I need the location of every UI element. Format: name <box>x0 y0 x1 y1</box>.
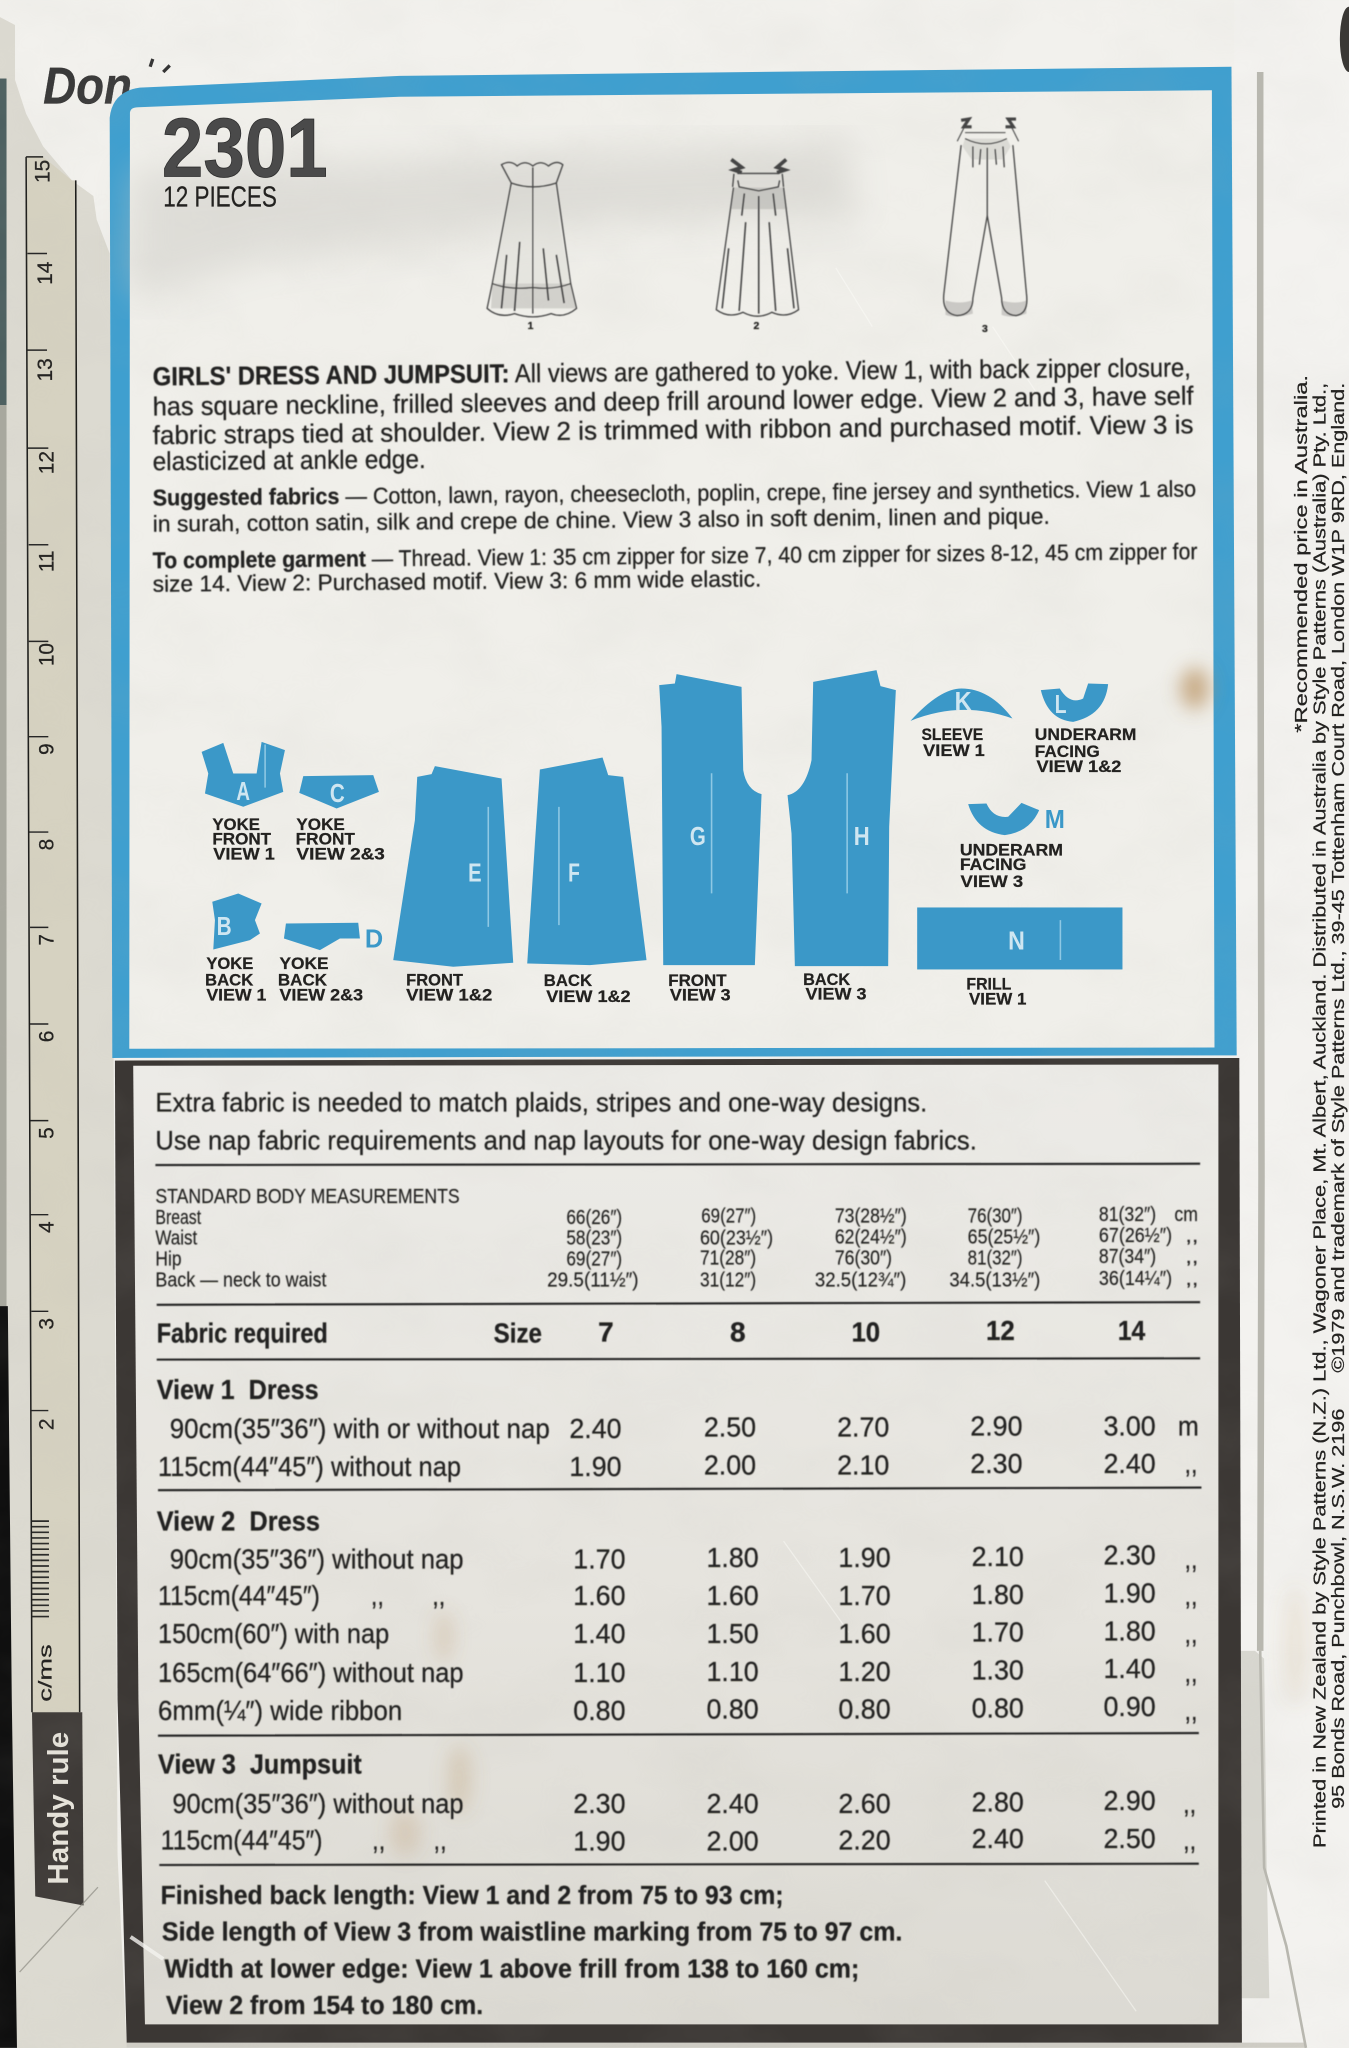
description: to complete garment: To complete garment — Thread. View 1: 35 cm zipper for size 7, 40 cm zipper for sizes 8-12, 45 cm zipper for <box>153 538 1198 573</box>
view 2 dress section: ,, <box>432 1580 445 1611</box>
view 2 dress section: 6mm(¼″) wide ribbon <box>158 1695 402 1726</box>
view 2 dress section: ,, <box>371 1580 384 1611</box>
view 1 dress section: 1.90 <box>569 1451 622 1482</box>
standard body measurements table <box>155 1186 1198 1291</box>
view 3 jumpsuit section: 2.40 <box>706 1788 759 1819</box>
piece captions: VIEW 2&3 <box>296 845 385 863</box>
view 1 dress section: 2.40 <box>1103 1448 1156 1479</box>
view 2 dress section: 1.20 <box>838 1656 891 1687</box>
right margin imprint text: *Recommended price in Australia. <box>1291 375 1311 733</box>
view 2 dress section: ,, <box>1184 1618 1198 1649</box>
view 3 jumpsuit section: 2.30 <box>573 1788 626 1819</box>
piece captions: YOKE <box>279 955 329 973</box>
description: to complete garment <box>153 538 1198 597</box>
standard body measurements table: 58(23″) <box>566 1228 622 1250</box>
view 2 dress section: 1.30 <box>972 1655 1024 1686</box>
piece captions: FACING <box>1035 743 1100 761</box>
view 2 dress section: 2.30 <box>1103 1540 1156 1571</box>
view 3 jumpsuit section: View 3 Jumpsuit <box>158 1749 362 1780</box>
piece captions: FACING <box>960 856 1026 874</box>
standard body measurements table: ,, <box>1185 1268 1198 1290</box>
piece letters: A <box>236 776 250 806</box>
view 2 dress section: 0.90 <box>1103 1691 1156 1722</box>
ruler numbers <box>32 160 59 1430</box>
illustration: view 3 jumpsuit: 3 <box>982 324 988 335</box>
piece letters: K <box>955 686 972 716</box>
view 1 dress section: 2.90 <box>970 1410 1023 1441</box>
description: girls' dress and jumpsuit: has square neckline, frilled sleeves and deep frill around lower edge. View 2 and 3, have self <box>153 381 1194 421</box>
standard body measurements table: 31(12″) <box>700 1269 756 1291</box>
standard body measurements table: Back — neck to waist <box>155 1269 327 1291</box>
ruler: c/ms <box>35 1644 56 1702</box>
finished measurements notes: Side length of View 3 from waistline marking from 75 to 97 cm. <box>162 1917 902 1947</box>
piece captions: VIEW 1&2 <box>406 986 492 1004</box>
view 3 jumpsuit section: 2.40 <box>972 1823 1024 1854</box>
standard body measurements table: 65(25½″) <box>968 1226 1040 1248</box>
table text <box>155 1087 1201 2020</box>
view 2 dress section: ,, <box>1184 1544 1198 1575</box>
view 3 jumpsuit section: ,, <box>1183 1788 1196 1819</box>
ruler <box>26 157 84 1905</box>
standard body measurements table: Waist <box>155 1228 198 1250</box>
piece captions: VIEW 1 <box>969 990 1026 1008</box>
standard body measurements table: Breast <box>155 1207 201 1229</box>
right group piece shapes <box>659 670 1122 969</box>
view 1 dress section: 2.40 <box>569 1413 622 1444</box>
view 1 dress section: View 1 Dress <box>157 1374 319 1405</box>
view 3 jumpsuit section: ,, <box>434 1824 447 1855</box>
piece captions: VIEW 1&2 <box>1036 758 1121 776</box>
description: girls' dress and jumpsuit: elasticized at ankle edge. <box>153 444 426 476</box>
view 2 dress section: 1.80 <box>1103 1615 1156 1646</box>
ruler numbers: 5 <box>36 1127 59 1139</box>
table panel frame <box>115 1058 1242 2043</box>
piece captions: VIEW 3 <box>670 987 731 1005</box>
view 2 dress section: 1.40 <box>1103 1653 1156 1684</box>
view 1 dress section: 90cm(35″36″) with or without nap <box>170 1413 550 1444</box>
left torn flap <box>0 17 127 2048</box>
creases and shading <box>20 141 1136 2011</box>
standard body measurements table: 29.5(11½″) <box>547 1269 639 1291</box>
standard body measurements table: 32.5(12¾″) <box>815 1269 906 1291</box>
view 1 dress section <box>157 1374 1199 1482</box>
view 2 dress section: 1.60 <box>573 1580 626 1611</box>
stains <box>389 667 1309 1856</box>
finished measurements notes <box>161 1880 902 2020</box>
view 2 dress section: 150cm(60″) with nap <box>158 1618 389 1649</box>
description: suggested fabrics: Suggested fabrics — Cotton, lawn, rayon, cheesecloth, poplin, crepe, fine jersey and synthetics. View 1 also <box>153 475 1196 511</box>
view 3 jumpsuit section: 2.80 <box>972 1786 1024 1817</box>
view 2 dress section: 1.70 <box>972 1617 1024 1648</box>
view 2 dress section: 0.80 <box>972 1692 1024 1723</box>
view 2 dress section <box>157 1506 1198 1726</box>
standard body measurements table: 73(28½″) <box>835 1205 907 1227</box>
piece captions: BACK <box>278 971 327 989</box>
standard body measurements table: 67(26½″) <box>1099 1225 1172 1247</box>
handy rule label: Handy rule <box>43 1732 75 1885</box>
view 2 dress section: 1.10 <box>706 1656 759 1687</box>
standard body measurements table: STANDARD BODY MEASUREMENTS <box>155 1186 460 1208</box>
view 2 dress section: 1.50 <box>706 1618 759 1649</box>
standard body measurements table: 66(26″) <box>566 1207 622 1229</box>
view 2 dress section: ,, <box>1184 1695 1198 1726</box>
finished measurements notes: Width at lower edge: View 1 above frill from 138 to 160 cm; <box>165 1953 859 1983</box>
piece captions: BACK <box>544 972 592 990</box>
piece count: 12 PIECES <box>163 182 277 214</box>
view 1 dress section: m <box>1178 1410 1199 1441</box>
standard body measurements table: cm <box>1174 1204 1198 1226</box>
ruler numbers: 6 <box>36 1031 59 1042</box>
description: girls' dress and jumpsuit: GIRLS' DRESS AND JUMPSUIT: All views are gathered to yoke. View 1, with back zipper closure, <box>153 352 1191 391</box>
size header row: 12 <box>986 1315 1015 1346</box>
piece captions: UNDERARM <box>960 842 1063 860</box>
view 3 jumpsuit section: 2.20 <box>838 1824 891 1855</box>
view 2 dress section: 90cm(35″36″) without nap <box>170 1544 464 1575</box>
view 1 dress section: 3.00 <box>1103 1410 1156 1441</box>
handy rule label <box>32 1712 84 1905</box>
view 2 dress section: 2.10 <box>972 1541 1024 1572</box>
illustration: view 2 dress <box>716 159 799 332</box>
standard body measurements table: 69(27″) <box>701 1205 756 1227</box>
view 2 dress section: 1.70 <box>573 1544 626 1575</box>
right fold line <box>1260 72 1306 2048</box>
piece letters: L <box>1055 689 1067 719</box>
piece letters: F <box>568 858 580 888</box>
piece captions: YOKE <box>296 816 345 834</box>
size header row: Fabric required <box>157 1318 328 1349</box>
finished measurements notes: Finished back length: View 1 and 2 from 75 to 93 cm; <box>161 1880 784 1910</box>
piece letters: B <box>217 911 232 941</box>
piece captions: UNDERARM <box>1035 726 1136 744</box>
view 3 jumpsuit section: 2.90 <box>1103 1785 1156 1816</box>
pattern pieces diagram <box>202 670 1136 1008</box>
standard body measurements table: ,, <box>1185 1246 1198 1268</box>
view 2 dress section: 1.90 <box>1103 1578 1156 1609</box>
handwritten note: Don <box>43 57 132 115</box>
illustration: view 3 jumpsuit <box>944 119 1027 335</box>
standard body measurements table: 60(23½″) <box>700 1228 773 1250</box>
standard body measurements table: ,, <box>1185 1225 1198 1247</box>
piece captions: VIEW 3 <box>960 873 1023 891</box>
view 3 jumpsuit section: 115cm(44″45″) <box>161 1824 323 1855</box>
view 2 dress section: 115cm(44″45″) <box>158 1580 320 1611</box>
piece captions: VIEW 2&3 <box>279 986 363 1004</box>
ruler numbers: 15 <box>32 160 55 183</box>
piece captions: BACK <box>205 971 254 989</box>
view 2 dress section: ,, <box>1184 1657 1198 1688</box>
piece letters: G <box>690 821 706 851</box>
view 1 dress section: 2.70 <box>837 1412 889 1443</box>
piece letters: E <box>468 858 482 888</box>
piece captions: VIEW 1 <box>206 986 266 1004</box>
piece captions: VIEW 1 <box>923 742 985 760</box>
illustration: view 1 dress <box>487 162 577 332</box>
view 1 dress section: 2.00 <box>704 1450 756 1481</box>
size header row: 10 <box>851 1316 880 1347</box>
piece captions: VIEW 1 <box>213 845 275 863</box>
top right binding mark <box>1340 7 1349 72</box>
view 2 dress section: 0.80 <box>838 1694 891 1725</box>
piece letters <box>217 686 1067 956</box>
piece captions: FRONT <box>296 830 355 848</box>
description: girls' dress and jumpsuit: fabric straps tied at shoulder. View 2 is trimmed with ribbon and purchased motif. View 3 is <box>153 409 1194 450</box>
view 2 dress section: ,, <box>1184 1580 1198 1611</box>
blue frame panel <box>110 67 1237 1058</box>
standard body measurements table: 81(32″) <box>1099 1204 1156 1226</box>
view 3 jumpsuit section: 2.50 <box>1103 1823 1156 1854</box>
piece captions: FRONT <box>212 830 271 848</box>
view 1 dress section: 2.10 <box>837 1450 889 1481</box>
right margin imprint text: 95 Bonds Road, Punchbowl, N.S.W. 2196 ©1979 and trademark of Style Patterns Ltd., 39-45 Tottenham Court Road, London W1P 9RD, England. <box>1328 383 1348 1809</box>
view 2 dress section: 1.60 <box>838 1618 891 1649</box>
view 3 jumpsuit section <box>158 1749 1196 1857</box>
finished measurements notes: View 2 from 154 to 180 cm. <box>166 1990 483 2020</box>
piece captions: YOKE <box>212 816 260 834</box>
view 3 jumpsuit section: 2.60 <box>838 1788 891 1819</box>
view 3 jumpsuit section: 90cm(35″36″) without nap <box>172 1788 464 1819</box>
piece letters: D <box>365 923 383 953</box>
piece captions: BACK <box>803 971 850 989</box>
view 2 dress section: 1.60 <box>706 1580 759 1611</box>
view 2 dress section: 1.90 <box>838 1542 891 1573</box>
view 2 dress section: 1.40 <box>573 1618 626 1649</box>
description: suggested fabrics <box>153 475 1196 537</box>
description: girls' dress and jumpsuit <box>153 352 1194 476</box>
view 2 dress section: 0.80 <box>573 1695 626 1726</box>
illustration: view 1 dress: 1 <box>528 321 534 332</box>
view 3 jumpsuit section: ,, <box>1183 1824 1196 1855</box>
piece captions: VIEW 3 <box>805 985 866 1003</box>
piece captions: FRILL <box>966 975 1011 993</box>
left group piece shapes <box>202 742 647 967</box>
standard body measurements table: 76(30″) <box>968 1205 1023 1227</box>
right margin imprint text: Printed in New Zealand by Style Patterns (N.Z.) Ltd., Wagoner Place, Mt. Albert, Auckland. Distributed in Australia by Style Patterns (Australia) Pty. Ltd., <box>1309 383 1329 1848</box>
ruler numbers: 12 <box>36 451 59 474</box>
illustration: view 2 dress: 2 <box>754 321 760 332</box>
ruler numbers: 3 <box>36 1318 59 1330</box>
view 2 dress section: 1.10 <box>573 1657 626 1688</box>
piece letters: C <box>330 778 345 808</box>
standard body measurements table: 87(34″) <box>1099 1246 1156 1268</box>
view 2 dress section: View 2 Dress <box>157 1506 320 1537</box>
size header row: 14 <box>1118 1315 1146 1346</box>
ruler numbers: 10 <box>36 643 59 666</box>
size header row: 8 <box>730 1316 746 1347</box>
fabric notes: Use nap fabric requirements and nap layouts for one-way design fabrics. <box>155 1125 977 1155</box>
view 2 dress section: 1.80 <box>972 1579 1024 1610</box>
view 3 jumpsuit section: ,, <box>372 1824 385 1855</box>
ruler numbers: 2 <box>36 1419 59 1430</box>
piece letters: N <box>1008 926 1025 956</box>
standard body measurements table: 62(24½″) <box>835 1226 907 1248</box>
ruler numbers: 9 <box>36 743 59 755</box>
size header row: Size <box>494 1318 542 1349</box>
pattern number: 2301 <box>162 100 328 194</box>
piece captions: FRONT <box>668 972 727 990</box>
view 3 jumpsuit section: 2.00 <box>706 1826 759 1857</box>
fabric notes <box>155 1087 977 1155</box>
size header row: 7 <box>598 1316 614 1347</box>
standard body measurements table: 69(27″) <box>566 1249 622 1271</box>
view 2 dress section: 1.80 <box>706 1542 759 1573</box>
piece captions: YOKE <box>206 955 253 973</box>
standard body measurements table: Hip <box>155 1249 182 1271</box>
standard body measurements table: 36(14¼″) <box>1099 1268 1172 1290</box>
fabric notes: Extra fabric is needed to match plaids, stripes and one-way designs. <box>155 1087 927 1117</box>
right margin imprint text <box>1291 375 1348 1848</box>
size header row <box>157 1315 1146 1349</box>
ruler numbers: 7 <box>36 934 59 946</box>
standard body measurements table: 71(28″) <box>700 1247 756 1269</box>
view 1 dress section: 2.50 <box>704 1412 756 1443</box>
piece letters: M <box>1045 804 1065 834</box>
description text <box>153 352 1198 597</box>
description: suggested fabrics: in surah, cotton satin, silk and crepe de chine. View 3 also in soft denim, linen and pique. <box>153 503 1050 537</box>
piece captions <box>205 726 1136 1008</box>
standard body measurements table: 76(30″) <box>835 1247 892 1269</box>
view 3 jumpsuit section: 1.90 <box>573 1826 626 1857</box>
view 2 dress section: 1.70 <box>838 1580 891 1611</box>
piece captions: FRONT <box>406 971 463 989</box>
standard body measurements table: 34.5(13½″) <box>949 1269 1040 1291</box>
description: to complete garment: size 14. View 2: Purchased motif. View 3: 6 mm wide elastic. <box>153 565 761 597</box>
view 2 dress section: 0.80 <box>706 1694 759 1725</box>
view 1 dress section: ,, <box>1184 1448 1198 1479</box>
ruler numbers: 4 <box>36 1221 59 1233</box>
piece letters: H <box>854 821 870 851</box>
ruler numbers: 13 <box>34 358 57 381</box>
grain lines <box>265 745 1060 960</box>
standard body measurements table: 81(32″) <box>968 1247 1023 1269</box>
piece captions: SLEEVE <box>921 726 983 744</box>
piece captions: VIEW 1&2 <box>546 988 631 1006</box>
ruler numbers: 14 <box>34 262 57 285</box>
ruler numbers: 11 <box>36 550 59 572</box>
view 1 dress section: 115cm(44″45″) without nap <box>158 1451 461 1482</box>
view 1 dress section: 2.30 <box>970 1448 1023 1479</box>
view 2 dress section: 165cm(64″66″) without nap <box>158 1657 464 1688</box>
ruler numbers: 8 <box>36 839 59 850</box>
